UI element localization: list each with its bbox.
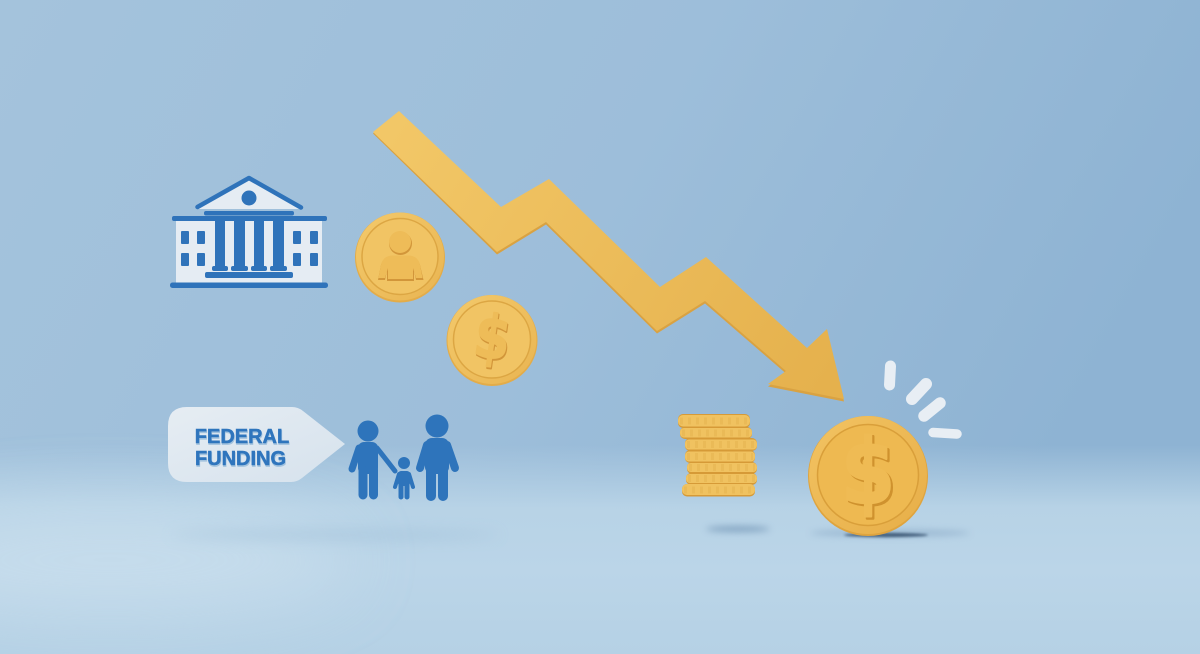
tag text: [195, 426, 290, 472]
person glyph: [378, 231, 424, 281]
icon: government building: [170, 177, 328, 288]
right parent: [420, 414, 455, 496]
columns: [170, 216, 328, 288]
icon: family: [352, 414, 455, 497]
icon: coin stack: [678, 414, 757, 496]
floor shadows: [170, 526, 970, 540]
windows: [181, 231, 318, 266]
child: [395, 457, 413, 497]
pediment: [196, 177, 302, 209]
coin edge ridges: [680, 421, 755, 490]
dollar glyph: $: [843, 421, 897, 526]
tag text: FEDERAL: [195, 428, 290, 450]
dollar glyph: $: [841, 419, 895, 524]
tag text: FEDERAL: [195, 426, 289, 448]
left parent: [352, 420, 395, 495]
arrow: falling trend: [373, 111, 844, 402]
label: federal funding tag: [168, 407, 345, 482]
icon: dollar coin small: [446, 295, 538, 386]
tag text: FUNDING: [195, 450, 287, 472]
dollar glyph: $: [470, 303, 516, 377]
icon: white sparkle lines: [890, 366, 957, 434]
icon: large dollar coin: [808, 416, 928, 536]
icon: person coin: [355, 212, 445, 302]
building walls: [176, 219, 322, 284]
tag text: FUNDING: [195, 448, 286, 470]
dollar glyph: $: [470, 301, 515, 375]
